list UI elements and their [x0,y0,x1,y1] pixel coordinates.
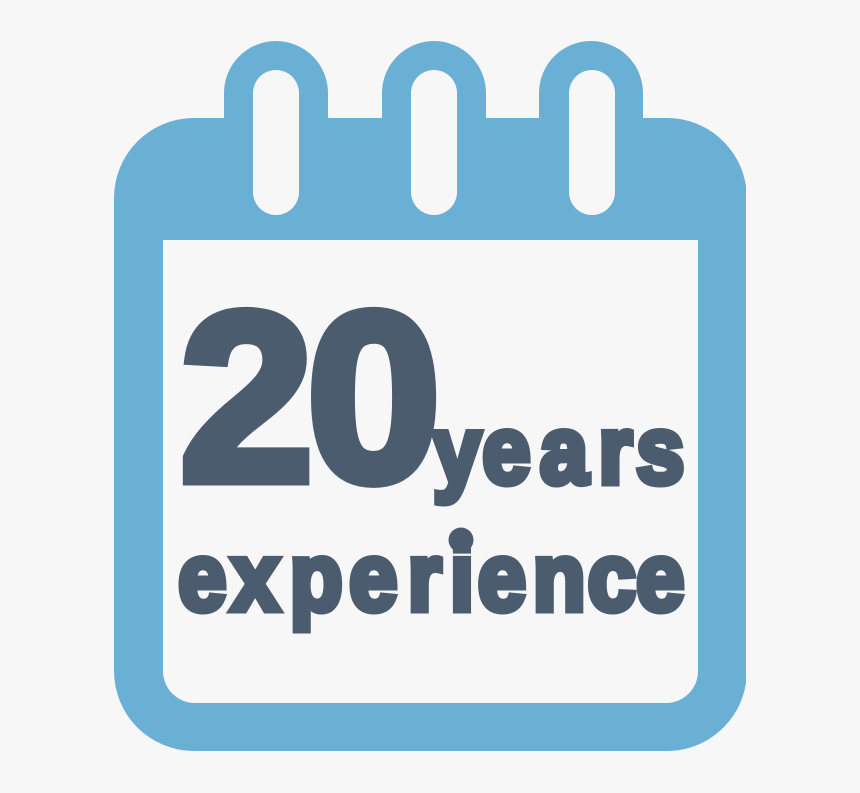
label: experience: experience [178,524,684,631]
binding ring 2 [382,41,486,215]
binding ring 3 [539,41,643,215]
label: years: years [433,397,684,504]
icon: calendar [114,41,746,751]
binding ring 1 [224,41,328,215]
calendar page [163,240,698,703]
number: 20: 20 [180,263,440,531]
calendar body [114,118,746,751]
